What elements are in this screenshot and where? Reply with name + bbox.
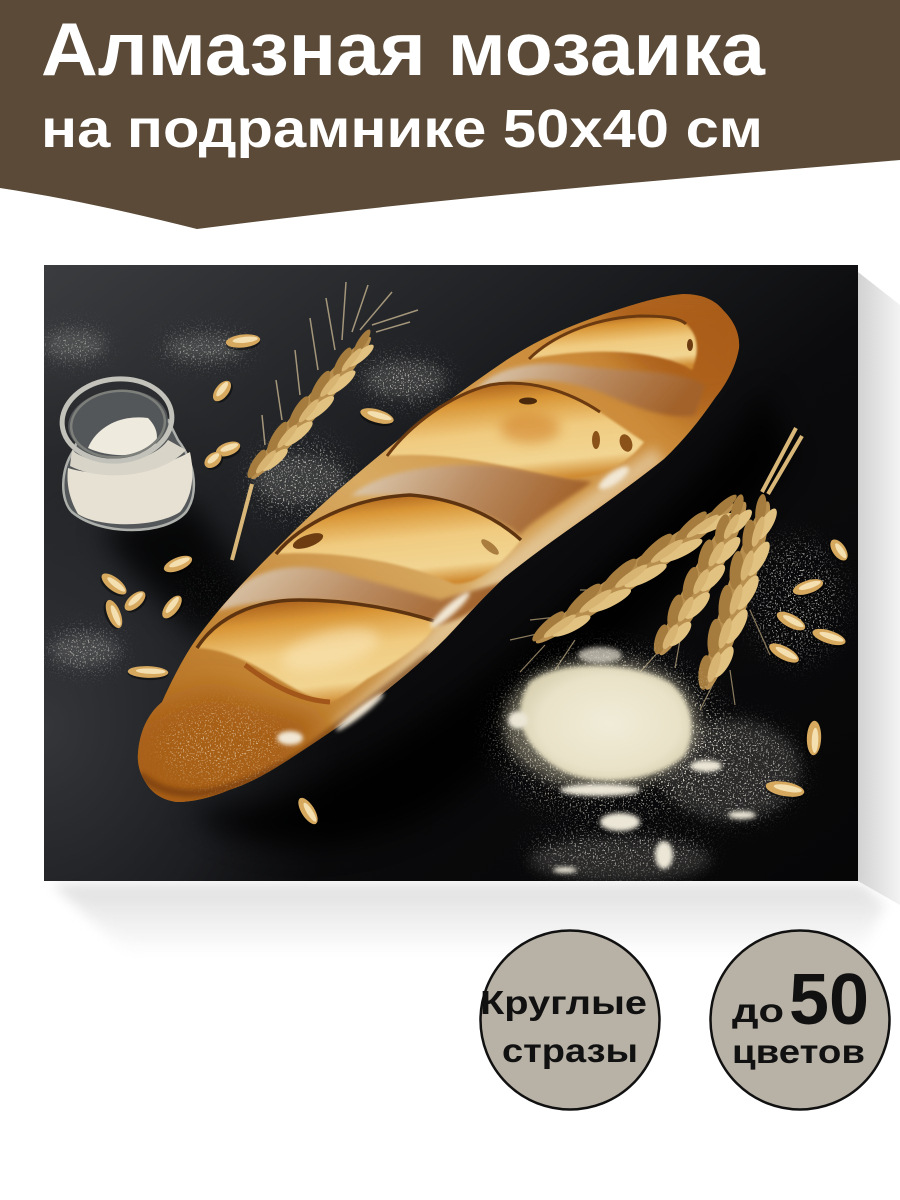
flour dusting on crust	[277, 463, 632, 745]
badge: round rhinestones: стразы	[502, 1032, 638, 1069]
banner	[0, 0, 900, 229]
icon: flour jar	[58, 373, 194, 530]
picture: canvas	[44, 265, 858, 882]
icon: wheat ear left	[232, 282, 418, 560]
badge: up to 50 colours	[710, 930, 890, 1110]
flour band lower	[217, 567, 510, 625]
bread slash 3	[276, 495, 521, 584]
badge: up to 50 colours: 50	[789, 960, 869, 1040]
icon: scattered grains	[97, 333, 851, 828]
crust ends and flank shading	[130, 690, 330, 820]
subtitle: на подрамнике 50х40 см	[41, 99, 763, 159]
jar shadow	[100, 500, 260, 640]
flour band top	[474, 364, 705, 416]
icon: wheat bundle right	[510, 428, 802, 710]
icon: flour pile	[495, 647, 756, 873]
bread slash 1	[529, 316, 697, 370]
slate left side	[44, 592, 280, 881]
copper band middle	[351, 465, 592, 535]
bread: baguette	[130, 290, 760, 820]
title: Алмазная мозаика	[41, 7, 766, 91]
bread slash 2	[387, 383, 644, 479]
bread shadow	[202, 424, 776, 846]
bread slash 4	[197, 600, 434, 702]
badge: round rhinestones: Круглые	[480, 984, 647, 1021]
badge: up to 50 colours: цветов	[732, 1033, 865, 1070]
badge: up to 50 colours: до	[732, 992, 784, 1029]
flour dust	[45, 331, 840, 882]
badge: round rhinestones	[480, 930, 660, 1110]
canvas shadow	[52, 272, 900, 955]
